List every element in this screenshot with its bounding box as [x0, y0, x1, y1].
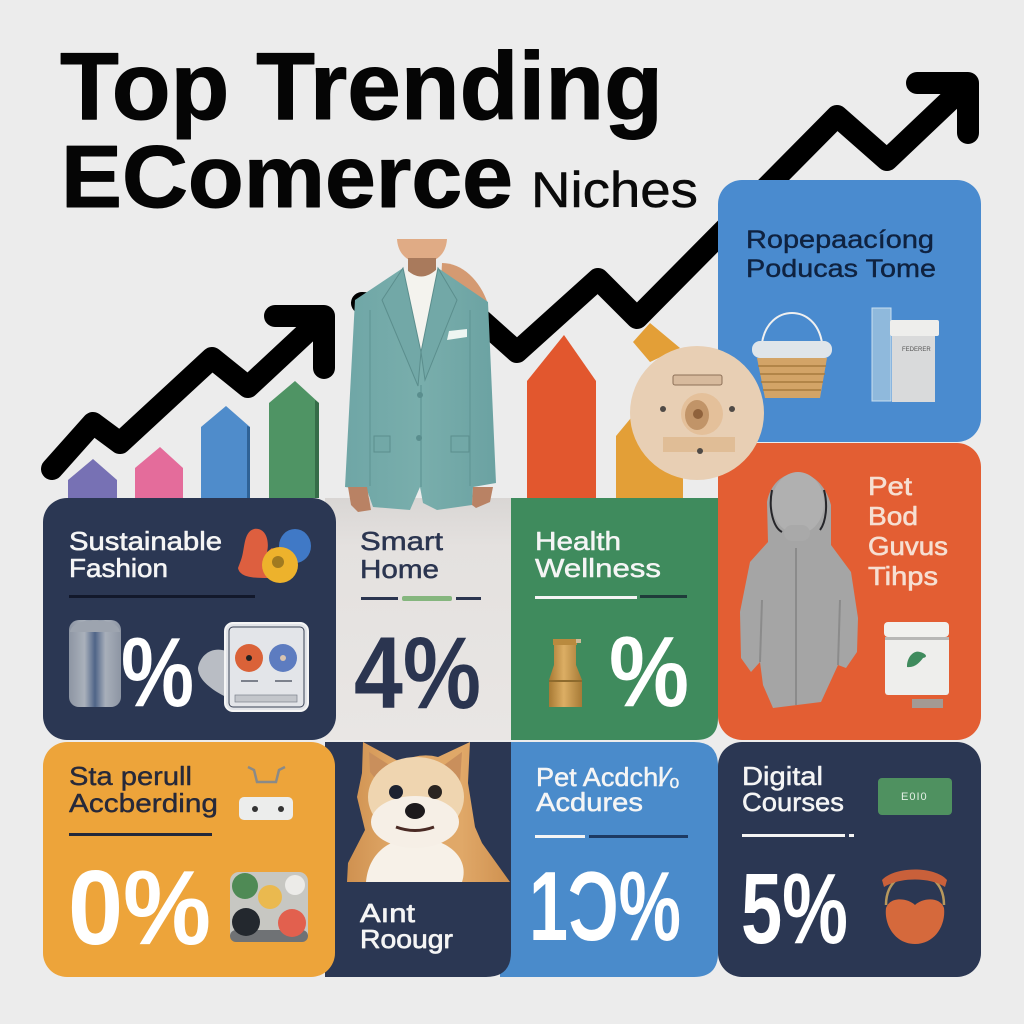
figure: mannequin in teal jacket — [345, 239, 496, 512]
heading: Bod — [868, 501, 918, 531]
heading: Fashion — [69, 553, 168, 583]
divider — [742, 834, 854, 837]
heading: Health — [535, 526, 621, 556]
divider — [535, 835, 585, 838]
panel: navy sustainable fashion — [43, 498, 336, 740]
icon: gold bottle — [549, 639, 582, 707]
heading: Sustainable — [69, 526, 222, 556]
icon: white device — [239, 767, 293, 820]
divider — [69, 595, 255, 598]
panel: orange hoodie — [718, 443, 981, 740]
percentage: 0% — [68, 849, 211, 967]
heading: Accberding — [69, 788, 218, 818]
image: dog — [347, 742, 510, 882]
icon: glass cylinder — [872, 308, 891, 401]
divider — [535, 596, 637, 599]
percentage: 4% — [354, 616, 481, 730]
heading: Home — [360, 554, 439, 584]
trend arrow: right — [362, 83, 968, 352]
heading: Courses — [742, 787, 844, 817]
percentage: % — [609, 616, 689, 728]
heading: Aınt — [360, 898, 416, 928]
divider — [361, 596, 481, 601]
panel: health wellness — [511, 498, 718, 740]
icon: heart bag — [882, 870, 947, 944]
heading: Guvus — [868, 531, 948, 561]
percentage: 1Ɔ% — [529, 851, 681, 961]
percentage: % — [121, 617, 194, 727]
bar chart: rising coloured bars — [68, 323, 683, 498]
panel: yellow — [43, 742, 335, 977]
icon: grey hoodie — [740, 472, 858, 708]
panel: blue percent — [500, 742, 718, 977]
title: EComerce — [61, 127, 513, 226]
heading: Poducas Tome — [746, 255, 936, 283]
heading: Smart — [360, 526, 444, 556]
heading: Pet Acdchl⁄₀ — [536, 762, 680, 792]
panel: blue product — [718, 180, 981, 442]
divider — [69, 833, 212, 836]
heading: Sta perull — [69, 761, 192, 791]
title: Top Trending — [60, 33, 663, 140]
icon: grey heart tag — [198, 650, 226, 697]
icon: green card — [878, 778, 952, 815]
title: Niches — [531, 162, 698, 218]
heading: Wellness — [535, 553, 661, 583]
icon: glass jar — [69, 620, 121, 707]
title — [60, 33, 698, 226]
heading: Pet — [868, 471, 913, 501]
icon: yarn cluster — [238, 529, 311, 583]
heading: Roougr — [360, 924, 453, 954]
trend arrow: left — [52, 316, 324, 469]
icon: white jar: FEDERER — [902, 347, 931, 353]
icon: white jar — [890, 320, 939, 402]
panel: navy dog — [325, 742, 511, 977]
icon: white supplement jar — [884, 622, 949, 708]
icon: tablet card — [225, 623, 308, 711]
heading: Acdures — [536, 787, 643, 817]
icon: green card: E0I0 — [901, 791, 928, 803]
heading: Digital — [742, 761, 823, 791]
heading: Tihps — [868, 561, 938, 591]
panel: smart home — [325, 498, 511, 740]
percentage: 5% — [741, 853, 848, 965]
icon: palette tray — [230, 872, 308, 942]
panel: digital courses — [718, 742, 981, 977]
icon: basket — [752, 313, 832, 398]
heading: Ropepaacíong — [746, 226, 934, 254]
icon: round wooden device — [630, 346, 764, 480]
